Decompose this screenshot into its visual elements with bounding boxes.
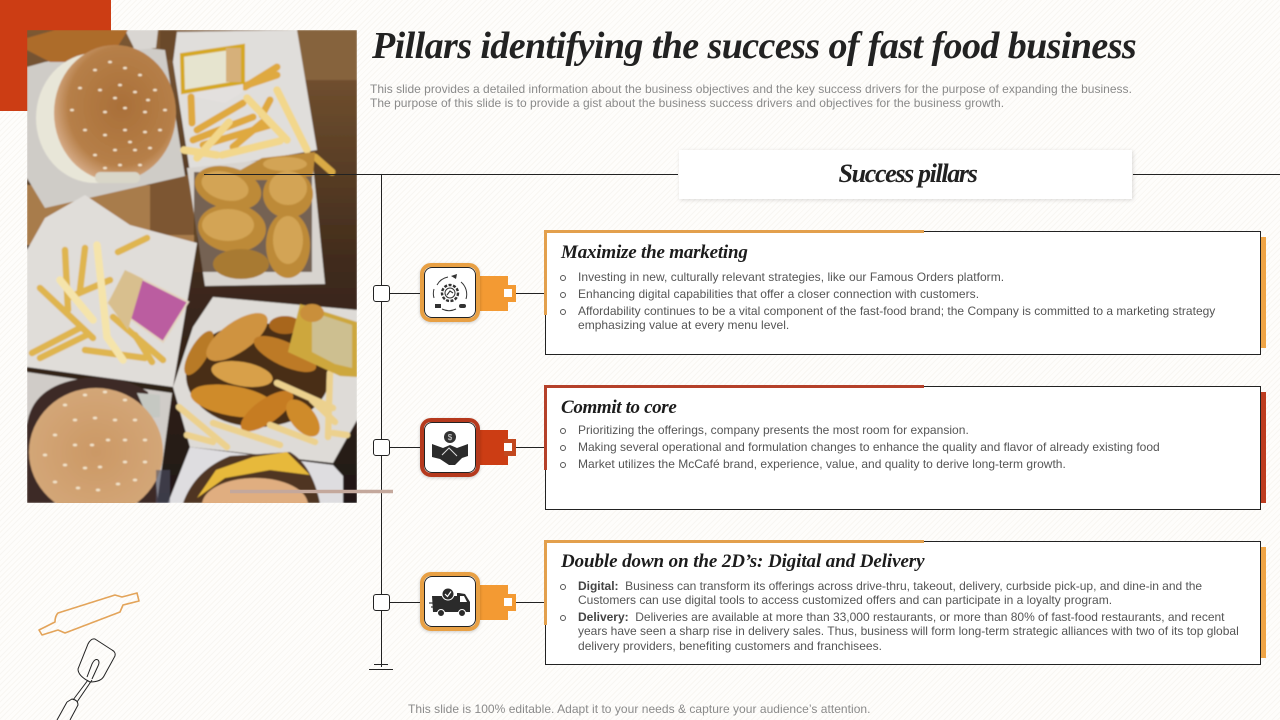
icon: rolling pin [38,592,140,636]
bullets: marketing [560,270,1216,332]
food photo [27,30,357,503]
subtitle description [370,82,1132,110]
bullets: digital and delivery: years have seen a sharp rise in delivery sales. Thus, business will form long-term strategic alliances with two of its top global [578,624,1239,638]
pillar 1 icon and connector [418,262,516,324]
bullets: core: Prioritizing the offerings, company presents the most room for expansion. [578,423,969,437]
panel: commit to core [544,385,1266,510]
bullets: marketing: Affordability continues to be a vital component of the fast-food brand; the Company is committed to a marketing strategy [578,304,1215,318]
bottom-left box and burger [27,372,172,503]
left-middle box [27,195,197,387]
bottom burger box [168,447,343,503]
footer note: This slide is 100% editable. Adapt it to your needs & capture your audience’s attention. [408,702,870,716]
bullets: digital and delivery [560,579,1239,653]
sauce tub [182,46,243,103]
heading box: success pillars [679,150,1132,199]
top-left box [27,47,185,208]
bullets: marketing: Investing in new, culturally relevant strategies, like our Famous Orders platform. [578,270,1004,284]
heading: maximize the marketing: Maximize the marketing [561,242,748,263]
panel: maximize the marketing [544,230,1266,355]
burger one [36,53,154,183]
panel: double down [544,540,1266,665]
subtitle description: The purpose of this slide is to provide a gist about the business success drivers and objectives for the business growth. [370,96,1004,110]
pillar 2 icon and connector [418,418,516,480]
bullets: marketing: Enhancing digital capabilities that offer a closer connection with customers. [578,287,979,301]
pillar 2 icon and connector: $ [448,433,453,442]
pink sauce [108,270,188,342]
bullets: digital and delivery: delivery providers, benefiting customers and franchisees. [578,639,882,653]
bullets: marketing: emphasizing value at every menu level. [578,318,789,332]
top-right box [173,30,317,172]
sauce bottom right [288,304,357,377]
heading: double down: Double down on the 2D’s: Digital and Delivery [561,551,924,572]
bullets: digital and delivery: Delivery: Deliveries are available at more than 33,000 restaurants, or more than 80% of fast-food restaurants, and recent [578,610,1224,624]
pillar 3 icon and connector [418,572,516,634]
bullets: digital and delivery: Digital: Business can transform its offerings across drive-thru, takeout, delivery, curbside pick-up, and dine-in and the [578,579,1202,593]
heading box: success pillars: Success pillars [839,159,976,188]
subtitle description: This slide provides a detailed information about the business objectives and the key success drivers for the purpose of expanding the business. [370,82,1132,96]
heading: commit to core: Commit to core [561,397,676,418]
bullets: digital and delivery: Customers can use digital tools to access customized offers and can participate in a loyalty program. [578,593,1112,607]
bullets: core: Market utilizes the McCafé brand, experience, value, and quality to derive long-term growth. [578,457,1066,471]
bullets: core: Making several operational and formulation changes to enhance the quality and flavor of already existing food [578,440,1160,454]
nugget box [187,155,325,286]
red corner block [0,0,111,111]
right-middle box [173,297,357,463]
bullets: core [560,423,1160,471]
title: Pillars identifying the success of fast food business [372,25,1136,67]
icon: spatula [56,638,116,720]
node markers [373,285,390,611]
